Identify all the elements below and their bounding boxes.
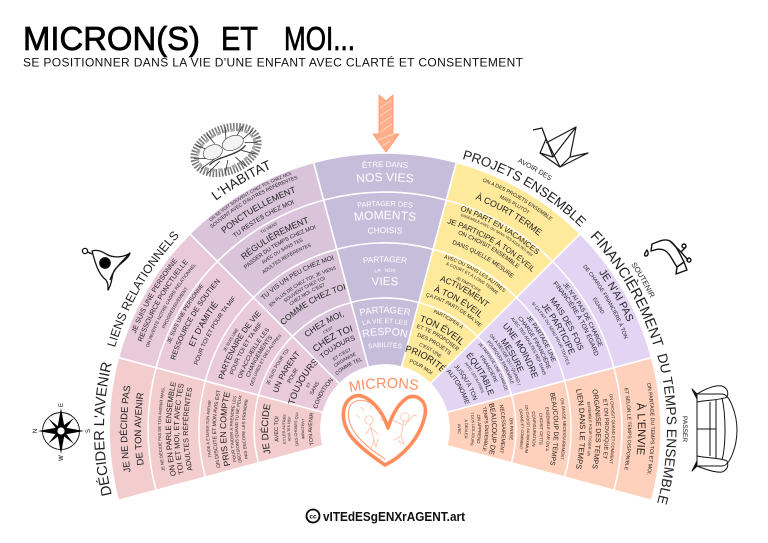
heading: soutenir financièrement: FINANCIÈREMENT <box>585 224 673 352</box>
outer ring text: ON INVENTE NOTRE CADRE RELATIONNEL <box>146 264 196 347</box>
second ring text: JE PARTICIPE <box>539 300 579 357</box>
second ring text <box>532 281 603 365</box>
second ring text: JE N'AI PAS DE CHARGE <box>561 280 606 349</box>
second ring text <box>158 382 192 476</box>
second ring text: TU VIENS <box>259 221 278 235</box>
title: MOI... <box>284 20 355 57</box>
inner ring text: BEAUCOUP DE <box>487 403 497 456</box>
heading: liens relationnels: LIENS RELATIONNELS <box>107 232 178 347</box>
second ring text: PASSER DU TEMPS CHEZ MOI <box>241 221 318 271</box>
third ring text: CHANGEMENTS <box>246 336 272 377</box>
subtitle: SE POSITIONNER DANS LA VIE D'UNE ENFANT AVEC CLARTÉ ET CONSENTEMENT <box>23 54 524 70</box>
inner ring text: COMME TEL <box>334 355 364 377</box>
second ring text: ON CHOISIT QUAND ET COMMENT <box>608 394 616 465</box>
outer ring text: DE CHARGE FINANCIÈRE À TON <box>581 262 632 341</box>
sector background <box>403 229 660 460</box>
inner ring text: PRIORITÉ <box>402 340 450 376</box>
heading: l'habitat: L'HABITAT <box>208 156 275 204</box>
sector background <box>314 153 456 367</box>
inner ring text: IMPACTENT <box>302 418 305 440</box>
inner ring text <box>360 306 410 348</box>
third ring text: QUAND ET COMMENT <box>518 409 524 450</box>
second ring text: ENSEMBLE POUR TISSER UN <box>586 402 592 457</box>
outer ring text: À COURT TERME <box>473 189 545 238</box>
second ring text: LIEN DANS LE TEMPS <box>574 388 587 470</box>
second ring text: DANS QUELLE MESURE <box>450 237 516 280</box>
outer ring text <box>118 386 144 472</box>
inner ring text <box>446 342 508 404</box>
third ring text: POUR T'AIDER À PRENDRE LES <box>229 396 236 462</box>
sector background <box>185 154 416 411</box>
third ring text: AVEC TES ADULTES RÉF DANS <box>509 315 550 377</box>
inner ring text <box>260 404 314 454</box>
icon: compass: W <box>59 455 65 461</box>
sector background <box>354 154 585 411</box>
icon: compass <box>33 403 92 461</box>
inner ring text: AVEC <box>457 424 461 434</box>
third ring text <box>519 392 567 466</box>
inner ring text: C'EST UNE <box>417 341 443 360</box>
outer ring text: NOS VIES <box>356 170 414 186</box>
outer ring text: ON A DES PROJETS ENSEMBLE <box>481 175 555 223</box>
third ring text <box>487 316 556 385</box>
third ring text: PARTAGER <box>362 255 408 265</box>
third ring text <box>206 390 248 468</box>
second ring text: ON CHOISIT ENSEMBLE <box>456 228 521 271</box>
outer ring text: ON SE VOIT SOUVENT, CHEZ TOI, CHEZ MOI, <box>206 167 294 223</box>
second ring text: ORGANISE DES TEMPS <box>590 389 601 470</box>
third ring text <box>218 310 282 386</box>
second ring text: ENSEMBLE AVEC OU SANS TES ADULTES RÉF <box>459 210 536 259</box>
outer ring text: RESSOURCE PONCTUELLE <box>138 259 188 342</box>
third ring text: POURQUOI ENSEMBLE <box>486 338 517 385</box>
icon: nest with eggs <box>187 117 265 183</box>
heading: avoir des projets ensemble: PROJETS ENSEMBLE <box>458 140 593 231</box>
inner ring text: TOUJOURS <box>318 333 358 361</box>
second ring text: JE NE DÉCIDE PAS DE TON AVENIR MAIS, <box>158 388 166 471</box>
panel: liens relationnels <box>107 232 338 413</box>
third ring text: ON ACCUEILLE LES <box>238 328 269 378</box>
sector background <box>109 358 323 500</box>
second ring text: CHOISIS <box>367 225 403 236</box>
third ring text: JE PARTICIPE <box>455 275 482 294</box>
third ring text: COMME CHEZ TOI <box>276 277 349 328</box>
second ring text: ON PART EN VACANCES <box>458 200 543 257</box>
third ring text: LA · NOS <box>374 268 396 274</box>
third ring text: À TON ÉVEIL <box>431 282 487 321</box>
third ring text: PRIS EN COMPTE <box>220 392 230 466</box>
third ring text: ON CHOISIT AU MAXIMUM <box>524 405 530 453</box>
third ring text: À COURT ET À LONG TERME <box>445 259 501 296</box>
heading: passer du temps ensemble: PASSER <box>681 416 688 442</box>
inner ring text: PARTICIPER À <box>432 308 466 331</box>
second ring text: POUR TOI ET POUR TA MIF <box>194 296 234 365</box>
panel: soutenir financièrement <box>430 230 664 412</box>
credit line: cc <box>309 514 317 520</box>
inner ring text: UN PARENT <box>272 350 299 392</box>
inner ring text <box>458 403 514 455</box>
outer ring text: MAIS PLUTÔT <box>498 193 531 216</box>
third ring text: EN PLUS DE CHEZ TOI, JE VIENS <box>266 262 338 309</box>
inner ring text: TON ÉVEIL <box>417 310 469 348</box>
third ring text: TU VIS UN PEU CHEZ MOI <box>258 250 336 302</box>
third ring text: ACTIVEMENT <box>438 271 492 310</box>
outer ring text: ÉGARD <box>591 296 606 316</box>
inner ring text <box>266 348 334 408</box>
third ring text <box>363 256 407 286</box>
third ring text: J'AIDE À ÉTAYER TON AVENIR <box>206 400 212 458</box>
icon: compass: E <box>59 403 65 407</box>
outer ring text: TU RESTES CHEZ MOI <box>231 197 296 240</box>
inner ring text: PARTAGER <box>358 304 412 318</box>
title: MICRON(S) <box>23 20 200 57</box>
second ring text: ET D'AMITIÉ <box>188 301 218 347</box>
outer ring text: PONCTUELLEMENT <box>217 181 299 236</box>
inner ring text: JE DÉCIDE <box>260 404 270 454</box>
inner ring text: JUSQU'À TON <box>452 362 480 402</box>
inner ring text: AVEC LES AUTRES <box>463 361 486 394</box>
second ring text: ET ON PROVOQUE ET <box>601 399 609 460</box>
center: microns heart <box>342 378 428 467</box>
inner ring text: FINANCIÈRE <box>478 354 500 385</box>
inner ring text: ET LES AUTRES <box>282 414 286 444</box>
second ring text: ADULTES RÉFÉRENTES <box>182 388 192 470</box>
outer ring text: DE TON AVENIR <box>134 393 144 466</box>
third ring text: ENSEMBLE CAR ON A <box>544 407 551 452</box>
third ring text: ON A DÉCIDÉ QU / QUAND / <box>488 331 525 387</box>
inner ring text: À DEALER <box>463 419 468 439</box>
inner ring text: ON PASSE <box>509 418 514 440</box>
arrow pointing down to the fan <box>373 95 399 152</box>
heading: soutenir financièrement: SOUTENIR <box>629 260 658 300</box>
third ring text: VIES <box>371 276 399 289</box>
credit line: vITEdESgENXrAGENT.art <box>323 510 466 524</box>
icon: faucet <box>645 240 691 274</box>
panel: passer du temps ensemble <box>448 354 688 505</box>
inner ring text: CHEZ TOI <box>309 320 356 355</box>
second ring text <box>576 389 615 469</box>
inner ring text: SABILITÉS <box>368 340 403 351</box>
inner ring text: JE SUIS POUR TOI <box>266 348 289 385</box>
inner ring text: CHEZ MOI, <box>301 307 347 340</box>
inner ring text: JE PARTAGE UNE CHARGE <box>477 340 512 392</box>
icon: compass: S <box>86 429 92 433</box>
icon: bell <box>82 248 130 290</box>
label: microns: MICRONS <box>348 376 420 396</box>
third ring text: CHOISIT CETTE <box>538 413 544 445</box>
icon: compass: N <box>33 429 39 433</box>
icon: origami bird <box>533 127 588 167</box>
third ring text: DÉCISIONS QUAND TU NE PEUX <box>235 395 242 463</box>
icon: two stick figures <box>356 405 417 450</box>
outer ring text: ON PARTAGE DU TEMPS TOI ET MOI, <box>645 383 655 475</box>
second ring text: RÉGULIÈREMENT <box>237 212 312 263</box>
third ring text: UNE MOINDRE <box>500 319 543 381</box>
third ring text: DES UNES ET DES AUTRES <box>250 334 282 386</box>
second ring text: RESSOURCE DE SOUTIEN <box>170 278 220 360</box>
third ring text: ON DISCUTE ET MON AVIS EST <box>212 390 220 468</box>
inner ring text: ET C'EST <box>331 347 352 362</box>
outer ring text: À L'ENVIE <box>634 402 647 456</box>
outer ring text <box>356 160 414 183</box>
outer ring text: PROGRESSIVEMENT <box>162 286 188 328</box>
panel: avoir des projets ensemble <box>401 150 586 382</box>
third ring text: CHARGE FINANCIÈRE <box>516 314 553 371</box>
third ring text <box>426 255 506 328</box>
inner ring text: SANS <box>309 380 322 396</box>
sector background <box>110 229 367 460</box>
inner ring text: ON APPREND <box>476 414 482 444</box>
third ring text: POUR TOI ET TA MIF <box>230 322 261 374</box>
second ring text: ON EN PARLE ENSEMBLE <box>166 382 176 476</box>
second ring text: FINANCIÈRE À TON ÉGARD <box>551 277 605 358</box>
third ring text: JE SUIS UNE <box>224 328 238 352</box>
inner ring text: LA VIE ET LES <box>362 318 409 327</box>
second ring text: JE SUIS UNE PERSONNE <box>167 284 204 344</box>
third ring text: SOUVENT CHEZ TOI <box>282 274 327 305</box>
inner ring text: DES CHOSES QUI <box>294 412 298 446</box>
third ring text: CONFIGURATION <box>531 411 537 447</box>
inner ring text: TON AVENIR <box>308 412 314 446</box>
inner ring text <box>405 310 463 374</box>
inner ring text: ORGANISÉ <box>332 350 357 369</box>
inner ring text: AVEC TOI <box>274 416 279 442</box>
icon: heart <box>343 396 425 465</box>
second ring text: MAIS DES FOIS <box>547 295 587 353</box>
heading: passer du temps ensemble <box>657 354 688 505</box>
panel: l'habitat <box>190 160 368 384</box>
second ring text: ADULTES RÉFÉRENTES <box>260 240 313 276</box>
third ring text: PAS ENCORE LES PRENDRE <box>242 399 248 459</box>
third ring text: CHEZ MOI, C'EST <box>288 281 327 308</box>
inner ring text: RESPON <box>361 326 409 340</box>
sector background <box>447 358 661 500</box>
title: ET <box>221 20 258 57</box>
second ring text: TOI ET MOI, ET AVEC TES <box>174 384 184 475</box>
inner ring text: C'EST <box>322 325 334 335</box>
heading: décider l'avenir: DÉCIDER L'AVENIR <box>94 362 112 496</box>
outer ring text: SOUVENT AVEC D'AUTRES RÉFÉRENTES <box>207 170 300 231</box>
second ring text: PARTAGER DES <box>357 199 413 210</box>
third ring text: ÇA FAIT PARTI DE MA VIE <box>424 289 485 330</box>
third ring text <box>260 255 346 324</box>
inner ring text: AUTONOMIE <box>444 367 472 407</box>
second ring text <box>354 201 416 234</box>
panel: décider l'avenir <box>94 358 322 500</box>
outer ring text: JE NE DÉCIDE PAS <box>118 386 130 472</box>
inner ring text: POUR <box>287 368 298 384</box>
inner ring text: DES PROJETS <box>415 331 453 357</box>
outer ring text: ET SELON LE TEMPS DISPONIBLE <box>622 387 632 471</box>
inner ring text: TOUS LES JOURS <box>469 412 475 446</box>
outer ring text: ÊTRE DANS <box>362 160 408 170</box>
inner ring text: ET TE PROPOSER <box>415 322 461 353</box>
inner ring text: NÉCESSAIREMENT <box>497 404 506 455</box>
outer ring text: JE SUIS UNE PERSONNE <box>132 258 178 333</box>
inner ring text: ET <box>306 382 310 388</box>
second ring text: AVEC OU SANS TES <box>260 236 304 266</box>
third ring text: BEAUCOUP DE TEMPS <box>548 392 559 466</box>
third ring text: MESURE <box>498 336 527 375</box>
inner ring text: ADULTES RÉF <box>287 416 291 442</box>
third ring text: ON PASSE NÉCESSAIREMENT <box>559 398 567 461</box>
inner ring text: TOUJOURS <box>288 359 318 404</box>
second ring text: SI ÇA FAIT DU SENS POUR TOUTES <box>530 299 574 366</box>
inner ring text: TEMPS ENSEMBLE <box>481 406 489 452</box>
outer ring text: JE N'AI PAS <box>596 266 637 325</box>
inner ring text: ÉQUITABLE <box>463 349 499 398</box>
outer ring text <box>624 383 655 474</box>
inner ring text: CONDITION <box>311 376 336 411</box>
third ring text: PARTENAIRE DE VIE <box>218 310 262 380</box>
inner ring text <box>305 312 362 375</box>
heading: passer du temps ensemble: DU TEMPS ENSEMBLE <box>654 352 679 506</box>
panel: être dans nos vies (central column) <box>313 152 456 366</box>
outer ring text <box>475 178 553 236</box>
third ring text: JE PARTAGE UNE <box>524 313 559 364</box>
heading: avoir des projets ensemble: AVOIR DES <box>516 157 553 183</box>
inner ring text: POUR MOI <box>408 357 434 377</box>
icon: sofa <box>692 386 737 472</box>
second ring text: MOMENTS <box>353 208 417 224</box>
title <box>23 20 355 57</box>
second ring text: JE PARTICIPE À TON ÉVEIL <box>445 211 540 275</box>
third ring text: AVEC OU SANS LES AUTRES <box>442 251 509 295</box>
